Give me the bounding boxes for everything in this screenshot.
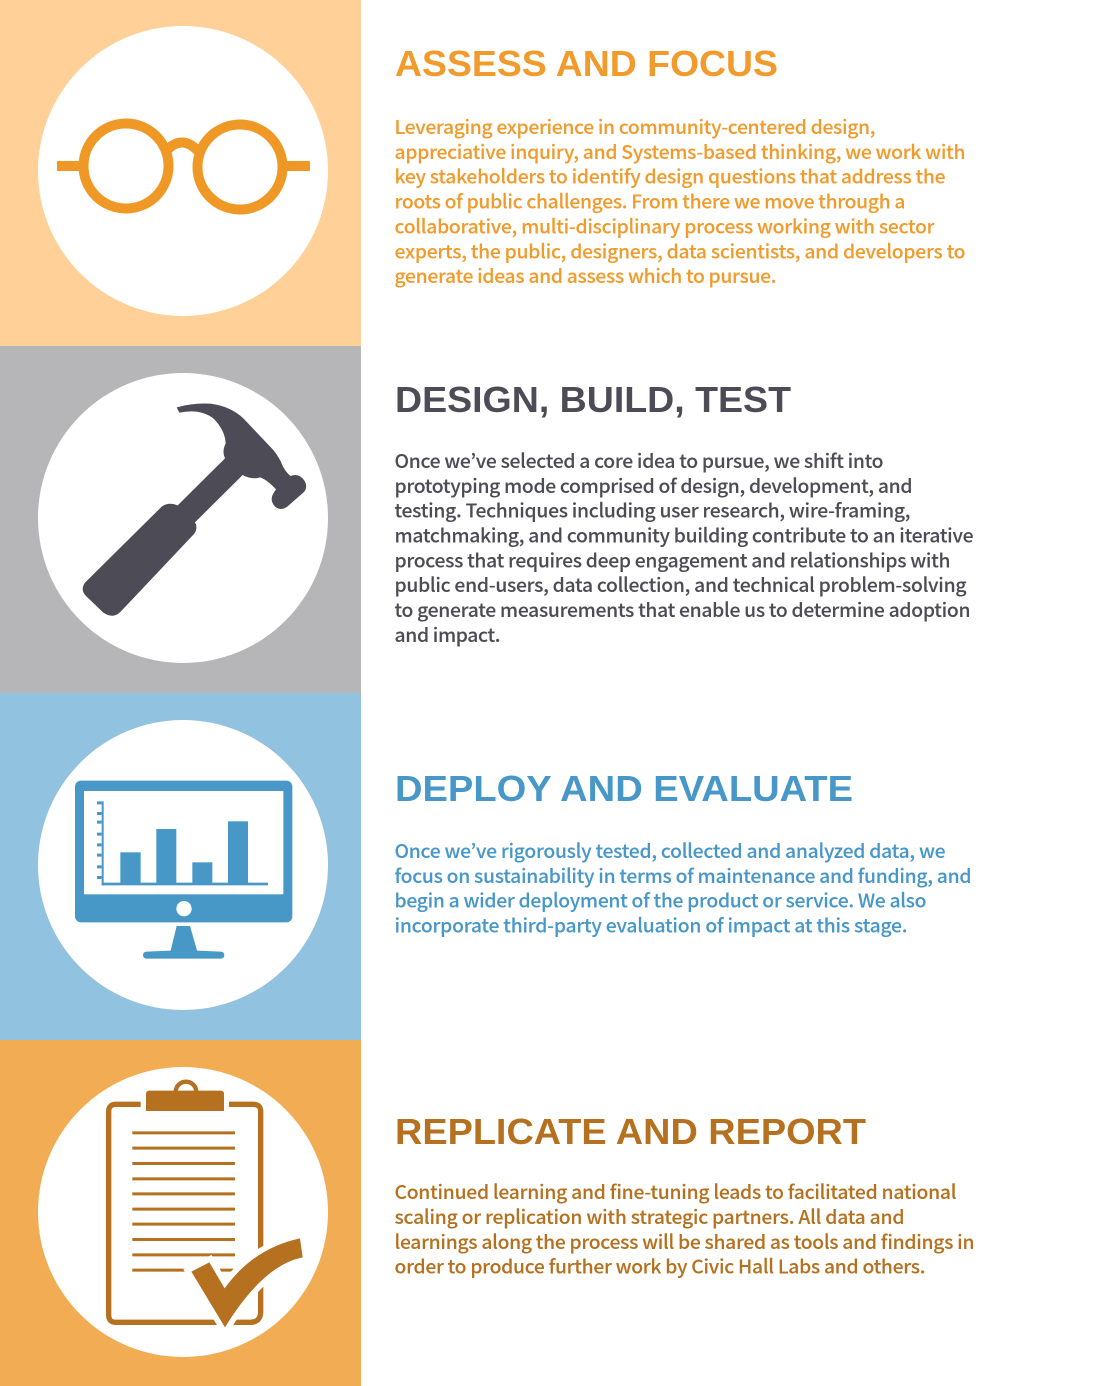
icon: monitor with bar chart bbox=[75, 781, 292, 959]
icon: hammer bbox=[83, 403, 306, 616]
text block: replicate description: learnings along the process will be shared as tools and findings in bbox=[394, 1227, 974, 1255]
text block: assess description: collaborative, multi-disciplinary process working with sector bbox=[394, 211, 935, 239]
icon: clipboard with check mark bbox=[109, 1082, 303, 1327]
text block: deploy description: Once we’ve rigorously tested, collected and analyzed data, we bbox=[394, 836, 946, 864]
text block: design description: matchmaking, and community building contribute to an iterative bbox=[394, 520, 974, 548]
text block: replicate description: order to produce further work by Civic Hall Labs and others. bbox=[394, 1252, 926, 1280]
panel: assess and focus bbox=[0, 0, 966, 346]
text block: deploy description: incorporate third-party evaluation of impact at this stage. bbox=[394, 910, 908, 938]
colour block: deploy bbox=[0, 693, 361, 1040]
text block: deploy description: begin a wider deployment of the product or service. We also bbox=[394, 886, 926, 914]
icon: glasses bbox=[57, 124, 310, 210]
text block: design description: process that requires deep engagement and relationships with bbox=[394, 545, 950, 573]
text block: design description: prototyping mode comprised of design, development, and bbox=[394, 471, 912, 499]
panel: replicate and report bbox=[0, 1040, 974, 1386]
text block: deploy description: focus on sustainability in terms of maintenance and funding, and bbox=[394, 861, 972, 889]
text block: assess description: roots of public challenges. From there we move through a bbox=[394, 187, 906, 215]
white circle: replicate bbox=[38, 1067, 328, 1357]
white circle: assess bbox=[38, 26, 328, 316]
text block: assess description: experts, the public, designers, data scientists, and developers to bbox=[394, 236, 966, 264]
panel: design build test bbox=[0, 346, 974, 693]
text block: design description: public end-users, data collection, and technical problem-solving bbox=[394, 570, 966, 598]
text block: design description: and impact. bbox=[394, 620, 500, 648]
text block: assess description bbox=[394, 112, 966, 289]
text block: design description bbox=[394, 446, 974, 648]
panel: deploy and evaluate bbox=[0, 693, 972, 1040]
text block: replicate description: Continued learning and fine-tuning leads to facilitated national bbox=[394, 1177, 957, 1205]
text block: replicate description: scaling or replication with strategic partners. All data and bbox=[394, 1202, 904, 1230]
colour block: replicate bbox=[0, 1040, 361, 1386]
text block: replicate description bbox=[394, 1177, 974, 1280]
text block: deploy description bbox=[394, 836, 972, 938]
white circle: design bbox=[38, 373, 328, 663]
text block: assess description: appreciative inquiry, and Systems-based thinking, we work with bbox=[394, 137, 966, 165]
text block: assess description: Leveraging experience in community-centered design, bbox=[394, 112, 876, 140]
text block: design description: to generate measurements that enable us to determine adoption bbox=[394, 595, 970, 623]
text block: design description: testing. Techniques including user research, wire-framing, bbox=[394, 496, 910, 524]
text block: assess description: key stakeholders to identify design questions that address the bbox=[394, 162, 946, 190]
colour block: assess bbox=[0, 0, 361, 346]
heading: deploy and evaluate: DEPLOY AND EVALUATE bbox=[395, 768, 853, 809]
heading: replicate and report: REPLICATE AND REPORT bbox=[395, 1111, 866, 1152]
colour block: design bbox=[0, 346, 361, 693]
white circle: deploy bbox=[38, 720, 328, 1010]
text block: assess description: generate ideas and assess which to pursue. bbox=[394, 261, 776, 289]
heading: assess and focus: ASSESS AND FOCUS bbox=[395, 43, 778, 84]
text block: design description: Once we’ve selected a core idea to pursue, we shift into bbox=[394, 446, 884, 474]
heading: design build test: DESIGN, BUILD, TEST bbox=[395, 379, 791, 420]
